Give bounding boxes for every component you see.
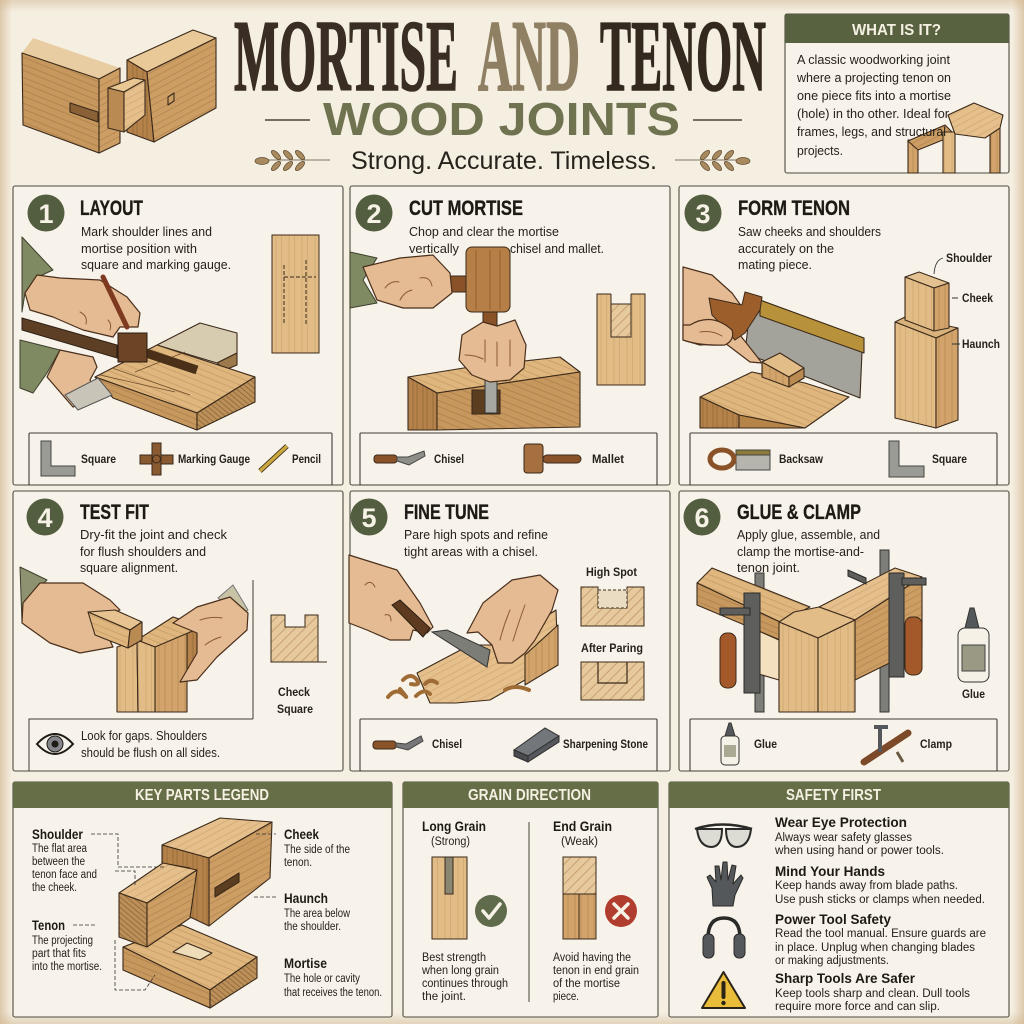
tools row: step 6 <box>690 719 997 771</box>
legend header <box>13 782 392 808</box>
icon: glue <box>721 723 739 765</box>
description: fine tune <box>404 527 548 559</box>
safety item: mind your hands: Keep hands away from blade paths. <box>775 880 958 892</box>
tools row: step 3 <box>690 433 997 485</box>
illustration: hands dry-fitting the joint <box>20 567 253 719</box>
icon: mallet <box>524 444 581 473</box>
label: shoulder: The flat area <box>32 843 88 855</box>
description: glue and clamp: tenon joint. <box>737 560 800 575</box>
step number 1 <box>28 194 64 232</box>
safety item: power tool safety: in place. Unplug when changing blades <box>775 942 975 954</box>
step number 1: 1 <box>38 199 54 229</box>
reference: high spot: High Spot <box>586 567 637 579</box>
icon: pencil <box>260 446 287 471</box>
step number 5: 5 <box>361 503 377 533</box>
reference: check square: Square <box>277 704 313 716</box>
tools row: step 5: Sharpening Stone <box>563 739 648 751</box>
end grain column <box>553 818 639 1003</box>
step number 6: 6 <box>694 503 710 533</box>
icon: backsaw <box>710 450 770 470</box>
long grain column: continues through <box>422 978 508 990</box>
safety item: sharp tools: Sharp Tools Are Safer <box>775 970 916 986</box>
reference: tenon diagram with labels: Haunch <box>962 339 1000 351</box>
step number 4: 4 <box>37 503 53 533</box>
safety item: mind your hands: Use push sticks or clamps when needed. <box>775 894 985 906</box>
description: form tenon: mating piece. <box>738 257 812 272</box>
safety item: eye protection: Always wear safety glasses <box>775 832 912 844</box>
reference: tenon diagram with labels: Cheek <box>962 293 994 305</box>
heading: form tenon: FORM TENON <box>738 197 850 220</box>
safety item: sharp tools: Keep tools sharp and clean. Dull tools <box>775 988 970 1000</box>
safety item: mind your hands <box>707 862 985 906</box>
label: haunch: the shoulder. <box>284 921 341 933</box>
icon: sharpening stone <box>514 728 559 762</box>
description: cut mortise: chisel and mallet. <box>510 241 604 256</box>
panel: step 3 form tenon <box>679 186 1009 485</box>
safety header <box>669 782 1009 808</box>
tip: look for gaps: should be flush on all sides. <box>81 745 220 760</box>
shavings <box>388 676 529 697</box>
grain header: GRAIN DIRECTION <box>468 787 591 804</box>
label: mortise: Mortise <box>284 955 327 971</box>
heading: test fit: TEST FIT <box>80 501 149 524</box>
description: test fit: Dry-fit the joint and check <box>80 527 227 542</box>
icon: eye <box>37 734 73 754</box>
panel: step 1 layout <box>13 186 343 485</box>
icon: warning triangle <box>702 972 745 1008</box>
tools row: step 2: Chisel <box>434 454 464 466</box>
label: shoulder: the cheek. <box>32 882 77 894</box>
icon: ear defenders <box>703 918 745 958</box>
reference: tenon diagram with labels <box>895 253 1000 428</box>
step number 6 <box>684 498 720 536</box>
description: form tenon: accurately on the <box>738 241 834 256</box>
safety item: power tool safety <box>703 911 986 967</box>
end grain column: piece. <box>553 991 579 1003</box>
grain header <box>403 782 658 808</box>
icon: glove <box>707 862 743 906</box>
safety header: SAFETY FIRST <box>786 787 881 804</box>
illustration: clamped joint <box>697 550 926 712</box>
safety item: power tool safety: Power Tool Safety <box>775 911 891 927</box>
heading: cut mortise: CUT MORTISE <box>409 197 523 220</box>
panel: step 2 cut mortise <box>350 186 670 485</box>
description: test fit: square alignment. <box>80 560 178 575</box>
icon: cross mark <box>605 895 637 927</box>
description: layout <box>81 224 231 272</box>
legend header: KEY PARTS LEGEND <box>135 787 269 804</box>
description: cut mortise: vertically <box>409 241 459 256</box>
label: cheek: The side of the <box>284 844 350 856</box>
safety item: sharp tools: require more force and can slip. <box>775 1001 940 1013</box>
long grain column: Long Grain <box>422 818 486 834</box>
step number 3 <box>684 194 722 232</box>
heading: glue and clamp: GLUE & CLAMP <box>737 501 861 524</box>
long grain column <box>421 818 508 1003</box>
label: mortise <box>284 955 382 999</box>
label: haunch: Haunch <box>284 890 328 906</box>
description: form tenon <box>738 224 881 272</box>
icon: clamp <box>864 727 908 762</box>
description: glue and clamp: clamp the mortise-and- <box>737 544 864 559</box>
panel: what is it <box>785 14 1009 173</box>
label: cheek: tenon. <box>284 857 312 869</box>
reference: tenon diagram with labels: Shoulder <box>946 253 992 265</box>
description: layout: Mark shoulder lines and <box>81 224 212 239</box>
label: mortise: The hole or cavity <box>284 973 360 985</box>
reference: after paring <box>581 643 644 700</box>
panel: key parts legend <box>13 782 392 1017</box>
tools row: step 1: Square <box>81 454 116 466</box>
illustration: hands chopping a mortise with chisel and mallet <box>350 247 580 430</box>
illustration: hands paring with chisel <box>349 555 558 703</box>
icon: chisel <box>374 451 425 465</box>
reference: marked board <box>272 235 319 353</box>
end grain column: of the mortise <box>553 978 620 990</box>
icon: chisel <box>373 736 423 750</box>
long grain column: when long grain <box>421 965 499 977</box>
label: tenon: The projecting <box>32 935 93 947</box>
safety item: eye protection <box>695 814 944 857</box>
safety item: power tool safety: or making adjustments. <box>775 955 889 967</box>
reference: after paring: After Paring <box>581 643 643 655</box>
panel: step 5 fine tune <box>349 491 670 771</box>
label: shoulder <box>32 826 97 894</box>
panel: what is it: one piece fits into a mortise <box>797 88 951 103</box>
reference: high spot <box>581 567 644 626</box>
tools row: step 5: Chisel <box>432 739 462 751</box>
tools row: step 5 <box>360 719 657 771</box>
description: glue and clamp: Apply glue, assemble, and <box>737 527 880 542</box>
panel: step 4 test fit <box>13 491 343 771</box>
subtitle: Wood Joints: WOOD JOINTS <box>323 93 680 145</box>
panel: what is it: (hole) in tho other. Ideal for <box>797 106 950 121</box>
step number 5 <box>350 498 388 536</box>
tools row: step 1: Pencil <box>292 454 321 466</box>
end grain column: End Grain <box>553 818 612 834</box>
reference: check square: Check <box>278 687 311 699</box>
diagram: exploded joint <box>73 818 277 1008</box>
tools row: step 1 <box>29 433 332 485</box>
long grain column: (Strong) <box>431 836 470 848</box>
title: Mortise and Tenon: AND <box>478 0 580 113</box>
label: tenon <box>32 917 102 973</box>
illustration: hands marking a beam with gauge <box>20 237 255 430</box>
illustration: hand sawing tenon with backsaw <box>683 267 864 428</box>
tools row: step 1: Marking Gauge <box>178 454 250 466</box>
step number 2: 2 <box>366 199 382 229</box>
label: shoulder: Shoulder <box>32 826 83 842</box>
icon: check mark <box>475 895 507 927</box>
icon: square <box>889 441 924 477</box>
long grain column: Best strength <box>422 952 486 964</box>
description: cut mortise <box>409 224 604 256</box>
tools row: step 3: Backsaw <box>779 454 823 466</box>
tools row: step 2 <box>360 433 657 485</box>
tools row: step 6: Glue <box>754 739 777 751</box>
safety item: eye protection: when using hand or power tools. <box>774 845 944 857</box>
icon: square <box>41 441 75 476</box>
label: haunch <box>284 890 351 933</box>
label: mortise: that receives the tenon. <box>284 987 382 999</box>
icon: glue bottle with label: Glue <box>962 689 985 701</box>
label: shoulder: tenon face and <box>32 869 97 881</box>
panel: step 6 glue and clamp <box>679 491 1009 771</box>
safety item: eye protection: Wear Eye Protection <box>775 814 907 830</box>
title: Mortise and Tenon: MORTISE <box>234 0 458 113</box>
description: layout: mortise position with <box>81 241 197 256</box>
panel: what is it: frames, legs, and structural <box>797 124 946 139</box>
panel: grain direction <box>403 782 658 1017</box>
heading: fine tune: FINE TUNE <box>404 501 489 524</box>
safety item: power tool safety: Read the tool manual. Ensure guards are <box>775 928 986 940</box>
label: cheek: Cheek <box>284 826 319 842</box>
tip: look for gaps <box>29 719 253 771</box>
safety item: sharp tools <box>702 970 970 1013</box>
tools row: step 3: Square <box>932 454 967 466</box>
description: test fit: for flush shoulders and <box>80 544 206 559</box>
panel: what is it: projects. <box>797 143 843 158</box>
description: glue and clamp <box>737 527 880 575</box>
safety item: mind your hands: Mind Your Hands <box>775 863 885 879</box>
description: cut mortise: Chop and clear the mortise <box>409 224 559 239</box>
label: cheek <box>284 826 350 869</box>
reference: check square <box>271 615 327 716</box>
panel: what is it: where a projecting tenon on <box>796 70 951 85</box>
label: shoulder: between the <box>32 856 85 868</box>
icon: marking gauge <box>140 443 173 475</box>
description: fine tune: Pare high spots and refine <box>404 527 548 542</box>
icon: safety glasses <box>695 824 752 847</box>
label: tenon: part that fits <box>32 948 86 960</box>
icon: glue bottle with label <box>958 608 989 701</box>
heading: layout: LAYOUT <box>80 197 143 220</box>
illustration: small stool <box>908 103 1003 173</box>
label: tenon: Tenon <box>32 917 65 933</box>
end grain column: Avoid having the <box>553 952 631 964</box>
description: test fit <box>80 527 227 575</box>
panel: what is it: WHAT IS IT? <box>852 22 941 39</box>
tools row: step 2: Mallet <box>592 454 624 466</box>
reference: mortise cross-section <box>597 293 645 385</box>
label: haunch: The area below <box>284 908 351 920</box>
long grain column: the joint. <box>422 991 466 1003</box>
tip: look for gaps: Look for gaps. Shoulders <box>81 728 207 743</box>
tagline with leaf ornaments: Strong. Accurate. Timeless. <box>351 147 657 175</box>
step number 2 <box>356 194 392 232</box>
step number 4 <box>26 498 64 536</box>
hero illustration: assembled mortise and tenon joint <box>22 30 216 153</box>
tagline with leaf ornaments <box>255 147 750 175</box>
end grain column: (Weak) <box>561 836 598 848</box>
label: tenon: into the mortise. <box>32 961 102 973</box>
panel: safety first <box>669 782 1009 1017</box>
description: layout: square and marking gauge. <box>81 257 231 272</box>
description: fine tune: tight areas with a chisel. <box>404 544 538 559</box>
end grain column: tenon in end grain <box>553 965 639 977</box>
text: TENON <box>600 0 766 113</box>
panel: what is it: A classic woodworking joint <box>797 52 950 67</box>
step number 3: 3 <box>695 199 711 229</box>
tools row: step 6: Clamp <box>920 739 952 751</box>
description: form tenon: Saw cheeks and shoulders <box>738 224 881 239</box>
